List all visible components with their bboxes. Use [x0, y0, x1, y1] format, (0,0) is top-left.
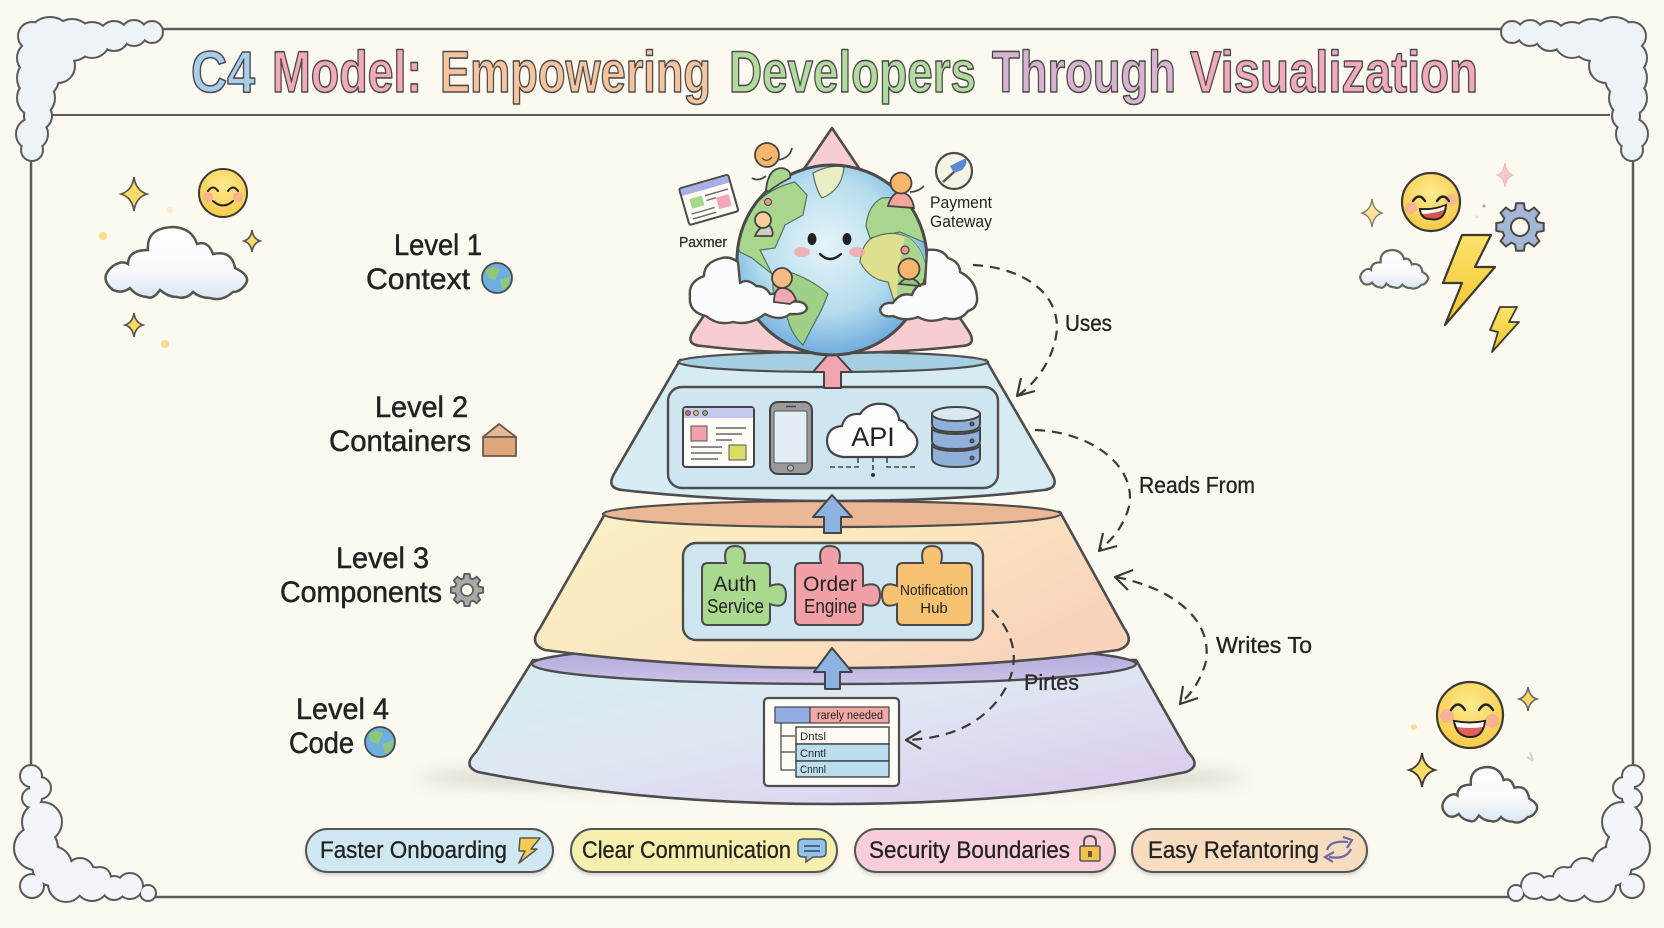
people around the globe	[752, 143, 924, 304]
continent: south america	[773, 272, 828, 345]
dashed arrow: uses	[973, 265, 1057, 396]
level 4 label: Code	[289, 727, 354, 760]
icon: database	[932, 407, 980, 467]
level 4 label	[289, 693, 389, 760]
pill: easy refactoring	[1132, 829, 1367, 875]
pill: security boundaries: Security Boundaries	[869, 837, 1070, 864]
icon: level 4 globe	[365, 727, 395, 757]
level 3 label: Components	[280, 576, 442, 609]
globe with face	[736, 165, 930, 355]
puzzle: order engine	[795, 546, 880, 625]
component panel	[683, 543, 983, 640]
pyramid tier: level 4 code	[469, 644, 1195, 804]
pill: clear communication	[571, 829, 837, 875]
title: Model:	[272, 40, 422, 105]
ground shadow	[417, 767, 1247, 789]
code class card: Cnntl	[800, 748, 826, 760]
pill: faster onboarding: Faster Onboarding	[320, 837, 507, 864]
corner cloud: bottom right	[1509, 766, 1649, 901]
continent: greenland	[813, 166, 844, 198]
label: reads from: Reads From	[1139, 472, 1255, 498]
person: top right	[888, 172, 924, 208]
dashed arrow: writes to code card	[906, 610, 1014, 749]
level 2 label: Level 2	[375, 391, 468, 424]
title: Through	[992, 40, 1176, 105]
tier arrow: level 2 to level 1	[813, 350, 852, 388]
pill: easy refactoring: Easy Refantoring	[1148, 837, 1319, 864]
continent: north america	[736, 182, 807, 274]
level 1 label: Context	[366, 263, 471, 296]
title: C4	[191, 40, 255, 105]
dashed arrow: reads from	[1035, 430, 1130, 551]
level 1 label	[366, 229, 482, 296]
pyramid tier: level 2 containers	[611, 352, 1055, 501]
level 1 label: Level 1	[394, 229, 482, 262]
tier arrow: level 4 to level 3	[814, 648, 852, 689]
dashed arrow: writes to	[1115, 570, 1207, 704]
globe face	[794, 233, 865, 259]
code class card: Dntsl	[800, 731, 826, 743]
marker: small pin on globe	[764, 198, 772, 206]
icon: API cloud: API	[851, 422, 895, 452]
person: left on globe	[755, 212, 773, 236]
label: Payment Gateway: Gateway	[930, 212, 992, 231]
puzzle: order engine: Engine	[804, 596, 857, 618]
title: Visualization	[1190, 40, 1478, 105]
icon: bolt	[519, 838, 540, 863]
puzzle: notification hub	[882, 546, 972, 625]
pyramid tier: level 1 triangle	[690, 128, 972, 353]
puzzle: notification hub: Hub	[920, 600, 948, 617]
pill: faster onboarding	[306, 829, 553, 875]
pill: security boundaries	[855, 829, 1115, 875]
icon: web app window	[683, 407, 754, 467]
globe side clouds	[690, 250, 977, 323]
code class card	[764, 698, 899, 786]
icon: level 3 gear	[451, 574, 483, 606]
label: Paxmer: Paxmer	[679, 234, 727, 251]
title: Empowering	[440, 40, 711, 105]
container panel	[668, 387, 998, 488]
label: writes to: Writes To	[1216, 632, 1312, 658]
title: Developers	[729, 40, 976, 105]
label: Payment Gateway	[930, 193, 992, 231]
label: pirtes: Pirtes	[1024, 670, 1079, 695]
code class card: Cnnnl	[800, 764, 826, 776]
decoration: top left face, cloud and sparkles	[99, 169, 260, 348]
label: Payment Gateway: Payment	[930, 193, 992, 212]
corner cloud: top left	[17, 18, 162, 160]
pyramid tier: level 3 components	[535, 501, 1129, 668]
person icon: browser window	[679, 175, 739, 225]
icon: refresh	[1325, 837, 1352, 862]
corner cloud: top right	[1502, 18, 1647, 160]
corner cloud: bottom left	[15, 766, 155, 901]
label: uses: Uses	[1065, 310, 1112, 336]
level 4 top ellipse	[532, 644, 1136, 684]
icon: padlock	[1080, 836, 1100, 861]
continent: europe and asia	[865, 197, 924, 243]
icon: level 1 globe	[482, 263, 512, 293]
icon: chat bubble	[798, 839, 826, 862]
person: on south america	[772, 268, 796, 304]
level 3 top ellipse	[603, 501, 1061, 527]
pill: clear communication: Clear Communication	[582, 837, 791, 864]
decoration: bottom right face, cloud and sparkles	[1409, 682, 1537, 823]
title	[191, 40, 1478, 105]
code class card: rarely needed	[817, 710, 883, 722]
puzzle: auth service	[702, 546, 786, 625]
icon: API cloud	[827, 404, 917, 477]
person: on africa	[898, 258, 920, 286]
icon: level 2 box	[483, 424, 516, 456]
puzzle: auth service: Service	[707, 596, 764, 618]
puzzle: auth service: Auth	[713, 573, 757, 596]
level 3 label: Level 3	[336, 542, 429, 575]
level 2 label	[329, 391, 471, 458]
tier arrow: level 3 to level 2	[813, 495, 852, 533]
puzzle: order engine: Order	[803, 573, 857, 596]
puzzle: notification hub: Notification	[900, 582, 968, 599]
continent: africa	[859, 232, 925, 301]
icon: payment gateway	[936, 153, 972, 189]
level 2 top ellipse	[678, 352, 988, 372]
person: top left	[752, 143, 792, 192]
decoration: top right face, gear, cloud and lightning	[1360, 163, 1544, 352]
level 2 label: Containers	[329, 425, 471, 458]
level 4 label: Level 4	[296, 693, 389, 726]
level 3 label	[280, 542, 442, 609]
marker: pink pin on globe	[901, 246, 909, 254]
icon: phone	[770, 402, 812, 474]
